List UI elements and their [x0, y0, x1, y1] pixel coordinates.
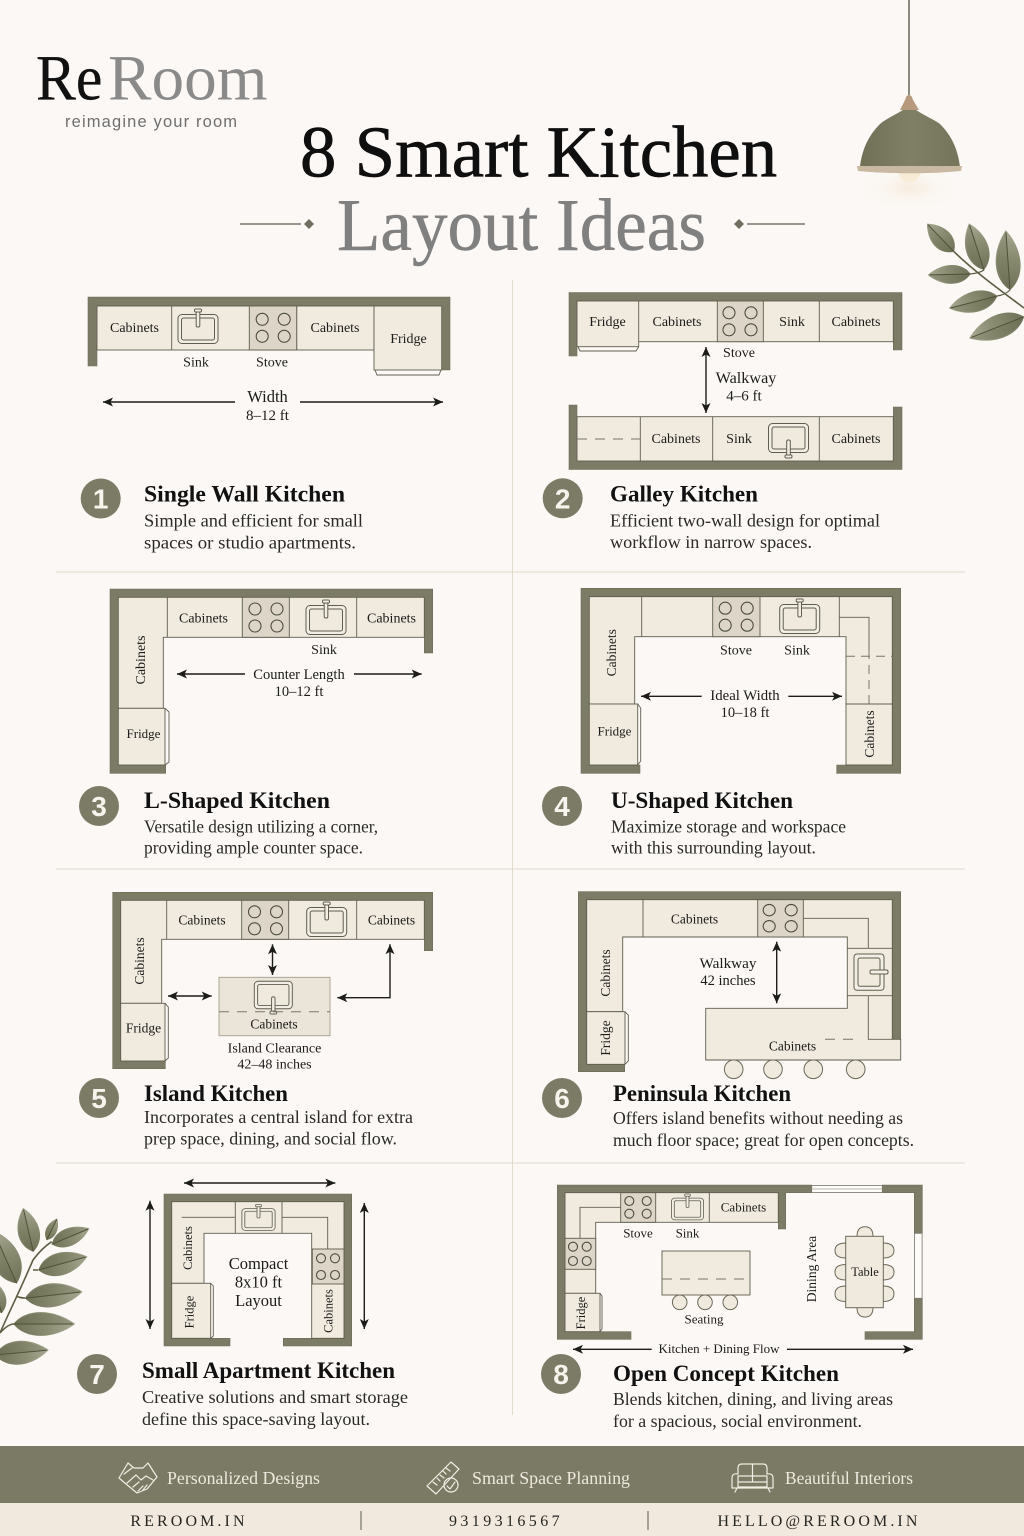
- floor plan: u-shaped: Ideal Width: [710, 688, 780, 704]
- number badge 4: 4: [554, 791, 570, 822]
- description: [142, 1387, 408, 1429]
- description: [610, 510, 880, 552]
- floor plan: small apartment: Cabinets: [322, 1289, 336, 1333]
- description: Blends kitchen, dining, and living areas: [613, 1389, 893, 1409]
- description: Efficient two-wall design for optimal: [610, 510, 880, 530]
- panel: island kitchen: [79, 892, 433, 1148]
- heading: single wall kitchen: Single Wall Kitchen: [144, 482, 345, 508]
- description: [144, 1107, 413, 1148]
- floor plan: single wall: Sink: [183, 356, 209, 370]
- floor plan: u-shaped: Fridge: [598, 724, 632, 738]
- floor plan: single wall: Stove: [256, 356, 288, 370]
- floor plan: l-shaped: [110, 589, 433, 773]
- description: [144, 816, 378, 858]
- floor plan: peninsula: Cabinets: [671, 912, 718, 926]
- floor plan: peninsula: Cabinets: [769, 1038, 816, 1054]
- floor plan: island: Cabinets: [250, 1016, 298, 1032]
- email: HELLO@REROOM.IN: [718, 1513, 920, 1530]
- icon: handshake: [119, 1463, 157, 1493]
- heading: island kitchen: Island Kitchen: [144, 1081, 288, 1107]
- description: Versatile design utilizing a corner,: [144, 816, 378, 836]
- logo: ReRoom: [36, 42, 268, 131]
- floor plan: open concept: Cabinets: [721, 1200, 766, 1214]
- panel dividers: [56, 280, 965, 1415]
- description: much floor space; great for open concepts.: [613, 1130, 914, 1150]
- floor plan: galley: Cabinets: [832, 432, 880, 447]
- description: Maximize storage and workspace: [611, 816, 846, 836]
- description: Incorporates a central island for extra: [144, 1107, 413, 1127]
- number badge 7: [77, 1354, 117, 1394]
- icon: sofa: [732, 1464, 773, 1492]
- floor plan: island: Cabinets: [132, 937, 147, 985]
- number badge 8: [541, 1354, 581, 1394]
- icon: ruler and pencil: [427, 1462, 459, 1494]
- description: workflow in narrow spaces.: [610, 532, 812, 552]
- floor plan: island: Cabinets: [368, 912, 415, 928]
- floor plan: peninsula: Fridge: [598, 1020, 613, 1056]
- floor plan: galley: Walkway: [716, 369, 777, 387]
- contact strip: [0, 1503, 1024, 1536]
- floor plan: single wall: Cabinets: [110, 321, 159, 336]
- floor plan: island: Fridge: [126, 1020, 161, 1036]
- floor plan: island: 42–48 inches: [237, 1058, 312, 1072]
- logo: ReRoom: reimagine your room: [65, 113, 238, 131]
- phone: 9319316567: [449, 1513, 563, 1530]
- floor plan: galley: Sink: [779, 315, 805, 330]
- floor plan: galley: Cabinets: [652, 315, 702, 330]
- floor plan: single wall: 8–12 ft: [246, 408, 290, 424]
- number badge 6: [542, 1078, 582, 1118]
- floor plan: island: Island Clearance: [228, 1042, 321, 1056]
- floor plan: l-shaped: Fridge: [127, 726, 161, 741]
- icon: pendant lamp: [857, 0, 962, 212]
- floor plan: open concept: [557, 1185, 922, 1356]
- panel: open concept kitchen: [541, 1185, 922, 1431]
- number badge 6: 6: [554, 1083, 570, 1114]
- description: providing ample counter space.: [144, 838, 363, 858]
- description: Offers island benefits without needing as: [613, 1108, 903, 1128]
- description: Creative solutions and smart storage: [142, 1387, 408, 1407]
- floor plan: open concept: Dining Area: [804, 1236, 819, 1302]
- floor plan: single wall: Width: [247, 387, 289, 406]
- description: prep space, dining, and social flow.: [144, 1128, 397, 1148]
- description: [611, 816, 846, 858]
- floor plan: open concept: Seating: [684, 1312, 724, 1326]
- floor plan: galley: Stove: [723, 346, 755, 361]
- floor plan: peninsula: Cabinets: [598, 949, 613, 997]
- floor plan: l-shaped: Cabinets: [367, 612, 416, 626]
- floor plan: open concept: Sink: [676, 1226, 700, 1240]
- description: [613, 1108, 914, 1150]
- floor plan: peninsula: Walkway: [700, 955, 757, 972]
- floor plan: l-shaped: Cabinets: [179, 612, 228, 626]
- number badge 3: 3: [91, 791, 107, 822]
- panel: small apartment kitchen: [77, 1183, 408, 1429]
- floor plan: u-shaped: Cabinets: [862, 710, 877, 758]
- floor plan: peninsula: 42 inches: [700, 973, 756, 989]
- heading: open concept kitchen: Open Concept Kitchen: [613, 1361, 839, 1387]
- floor plan: galley: [569, 292, 902, 470]
- website: REROOM.IN: [130, 1513, 248, 1530]
- floor plan: small apartment: 8x10 ft: [235, 1272, 283, 1292]
- title: [240, 112, 805, 267]
- logo: ReRoom: Room: [108, 42, 268, 114]
- floor plan: small apartment: [150, 1183, 364, 1346]
- heading: u-shaped kitchen: U-Shaped Kitchen: [611, 788, 793, 814]
- title: 8 Smart Kitchen: [300, 112, 777, 193]
- text: personalized designs: Personalized Designs: [167, 1468, 320, 1488]
- text: smart space planning: Smart Space Planning: [472, 1468, 630, 1488]
- floor plan: u-shaped: Cabinets: [604, 629, 619, 676]
- heading: galley kitchen: Galley Kitchen: [610, 482, 758, 508]
- floor plan: island: Cabinets: [178, 912, 226, 928]
- heading: peninsula kitchen: Peninsula Kitchen: [613, 1081, 791, 1107]
- description: define this space-saving layout.: [142, 1409, 370, 1429]
- number badge 2: 2: [555, 483, 570, 514]
- floor plan: open concept: Fridge: [574, 1296, 588, 1329]
- description: for a spacious, social environment.: [613, 1411, 862, 1431]
- decor: top right leaves: [920, 217, 1024, 349]
- panel: l-shaped kitchen: [79, 589, 433, 858]
- floor plan: island: [113, 892, 433, 1072]
- floor plan: small apartment: Cabinets: [181, 1226, 195, 1270]
- floor plan: single wall: Fridge: [390, 332, 427, 347]
- floor plan: l-shaped: Cabinets: [134, 636, 149, 684]
- floor plan: open concept: Kitchen + Dining Flow: [658, 1341, 780, 1356]
- panel: galley kitchen: [543, 292, 902, 552]
- floor plan: galley: Fridge: [589, 315, 626, 330]
- floor plan: small apartment: Layout: [235, 1291, 282, 1310]
- floor plan: single wall: [88, 297, 450, 424]
- panel: u-shaped kitchen: [542, 588, 901, 858]
- number badge 8: 8: [553, 1359, 569, 1390]
- floor plan: open concept: Table: [851, 1265, 879, 1279]
- description: [613, 1389, 893, 1431]
- floor plan: u-shaped: 10–18 ft: [721, 705, 769, 721]
- floor plan: l-shaped: 10–12 ft: [275, 684, 323, 700]
- floor plan: galley: Cabinets: [652, 432, 700, 447]
- logo: ReRoom: Re: [36, 42, 102, 114]
- floor plan: u-shaped: Stove: [720, 644, 752, 658]
- panel: peninsula kitchen: [542, 892, 914, 1150]
- number badge 1: [81, 478, 121, 518]
- floor plan: single wall: Cabinets: [310, 321, 360, 336]
- text: beautiful interiors: Beautiful Interiors: [785, 1468, 913, 1488]
- floor plan: galley: Cabinets: [832, 315, 880, 330]
- heading: l-shaped kitchen: L-Shaped Kitchen: [144, 788, 330, 814]
- floor plan: peninsula: [578, 892, 901, 1079]
- floor plan: small apartment: Compact: [229, 1254, 289, 1273]
- number badge 5: [79, 1078, 119, 1118]
- floor plan: u-shaped: [581, 588, 901, 773]
- number badge 2: [543, 478, 583, 518]
- panel: single wall kitchen: [81, 297, 450, 552]
- number badge 7: 7: [89, 1359, 105, 1390]
- decor: bottom left leaves: [0, 1205, 93, 1367]
- description: Simple and efficient for small: [144, 510, 363, 530]
- description: [144, 510, 363, 552]
- floor plan: small apartment: Fridge: [182, 1295, 196, 1328]
- number badge 4: [542, 786, 582, 826]
- description: with this surrounding layout.: [611, 838, 816, 858]
- number badge 5: 5: [91, 1083, 107, 1114]
- heading: small apartment kitchen: Small Apartment Kitchen: [142, 1358, 395, 1384]
- footer band: [0, 1446, 1024, 1503]
- number badge 3: [79, 786, 119, 826]
- floor plan: l-shaped: Counter Length: [253, 667, 345, 683]
- floor plan: galley: Sink: [726, 432, 752, 447]
- number badge 1: 1: [93, 484, 108, 514]
- floor plan: l-shaped: Sink: [311, 643, 337, 658]
- floor plan: galley: 4–6 ft: [726, 388, 763, 404]
- floor plan: open concept: Stove: [623, 1226, 653, 1240]
- title: Layout Ideas: [337, 185, 706, 267]
- floor plan: u-shaped: Sink: [784, 644, 810, 658]
- description: spaces or studio apartments.: [144, 532, 356, 552]
